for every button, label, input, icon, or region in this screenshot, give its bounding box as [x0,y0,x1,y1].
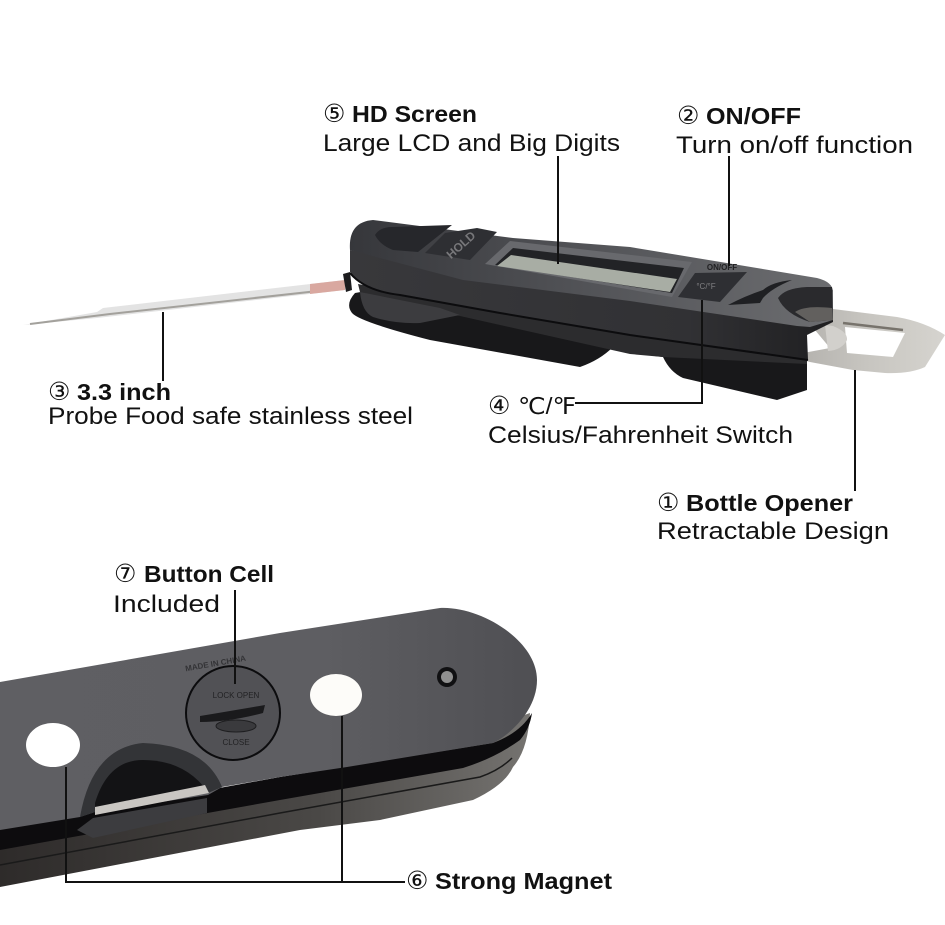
label: bottle opener: ① [657,488,679,517]
label: HD Screen [323,99,620,157]
callout line: button cell [234,590,236,684]
label: ON/OFF: ON/OFF [706,103,801,129]
callout line: celsius switch [575,300,702,403]
seam line [350,273,808,360]
label: celsius fahrenheit: ④ [488,391,510,420]
callout line: on/off [728,156,730,266]
magnet left [26,723,80,767]
opener slot edge [843,323,903,330]
folded probe [95,785,209,815]
opener pivot [825,325,847,351]
plate below notch [77,798,207,838]
clip plate [349,285,807,400]
probe: stainless steel needle [23,272,352,325]
label: 3.3 inch probe: 3.3 inch [77,379,171,405]
label: celsius fahrenheit: Celsius/Fahrenheit Switch [488,422,793,449]
lower body bulge [360,292,460,323]
callout line: HD screen [557,156,559,264]
body groove [0,758,512,865]
callout line: strong magnet [66,767,405,882]
screw [437,667,457,687]
magnet right [310,674,362,716]
opener cutout [778,287,833,322]
celsius fahrenheit button: °C/°F [696,282,716,291]
label: strong magnet: Strong Magnet [435,868,612,894]
label: 3.3 inch probe: ③ [48,377,70,406]
right dimple [728,280,792,305]
label: celsius fahrenheit [488,391,793,449]
battery cover [186,666,280,760]
black band [0,713,532,850]
label: HD Screen: Large LCD and Big Digits [323,130,620,157]
body side [350,250,833,360]
bottle opener blade [787,308,945,373]
callout line: bottle opener [854,370,856,491]
label: button cell: Included [113,591,220,618]
top face [350,220,833,327]
left dimple [375,225,452,252]
callout line: second magnet [341,716,343,882]
battery cover: LOCK OPEN [213,691,260,700]
label: 3.3 inch probe [48,377,413,430]
label: button cell: Button Cell [144,561,274,587]
callout line: probe [162,312,164,381]
battery cover: CLOSE [222,738,250,747]
thermometer: folding device with bottle opener [349,220,945,400]
back face [0,608,537,830]
notch recess [95,760,208,810]
label: strong magnet: ⑥ [406,866,428,895]
label: bottle opener: Retractable Design [657,518,889,545]
label: bottle opener: Bottle Opener [686,490,853,516]
label: HD Screen: HD Screen [352,101,477,127]
label: button cell: ⑦ [114,559,136,588]
label: 3.3 inch probe: Probe Food safe stainless steel [48,403,413,430]
thermometer back view [0,608,537,887]
label: celsius fahrenheit: ℃/℉ [518,393,576,419]
on/off label: ON/OFF [707,263,737,272]
finger notch [80,743,222,817]
lower body [0,713,530,887]
made in china mark: MADE IN CHINA [185,654,247,673]
label: button cell [113,559,274,618]
hold button [425,228,497,262]
label: ON/OFF [676,101,913,159]
label: bottle opener [657,488,889,545]
label: ON/OFF: Turn on/off function [676,132,913,159]
lower body band [358,284,807,364]
hold button: HOLD [444,228,479,262]
label: ON/OFF: ② [677,101,699,130]
label: HD Screen: ⑤ [323,99,345,128]
label: strong magnet [406,866,612,895]
LCD screen [485,241,692,297]
celsius fahrenheit button [678,272,747,302]
cutout reflection [795,307,833,322]
